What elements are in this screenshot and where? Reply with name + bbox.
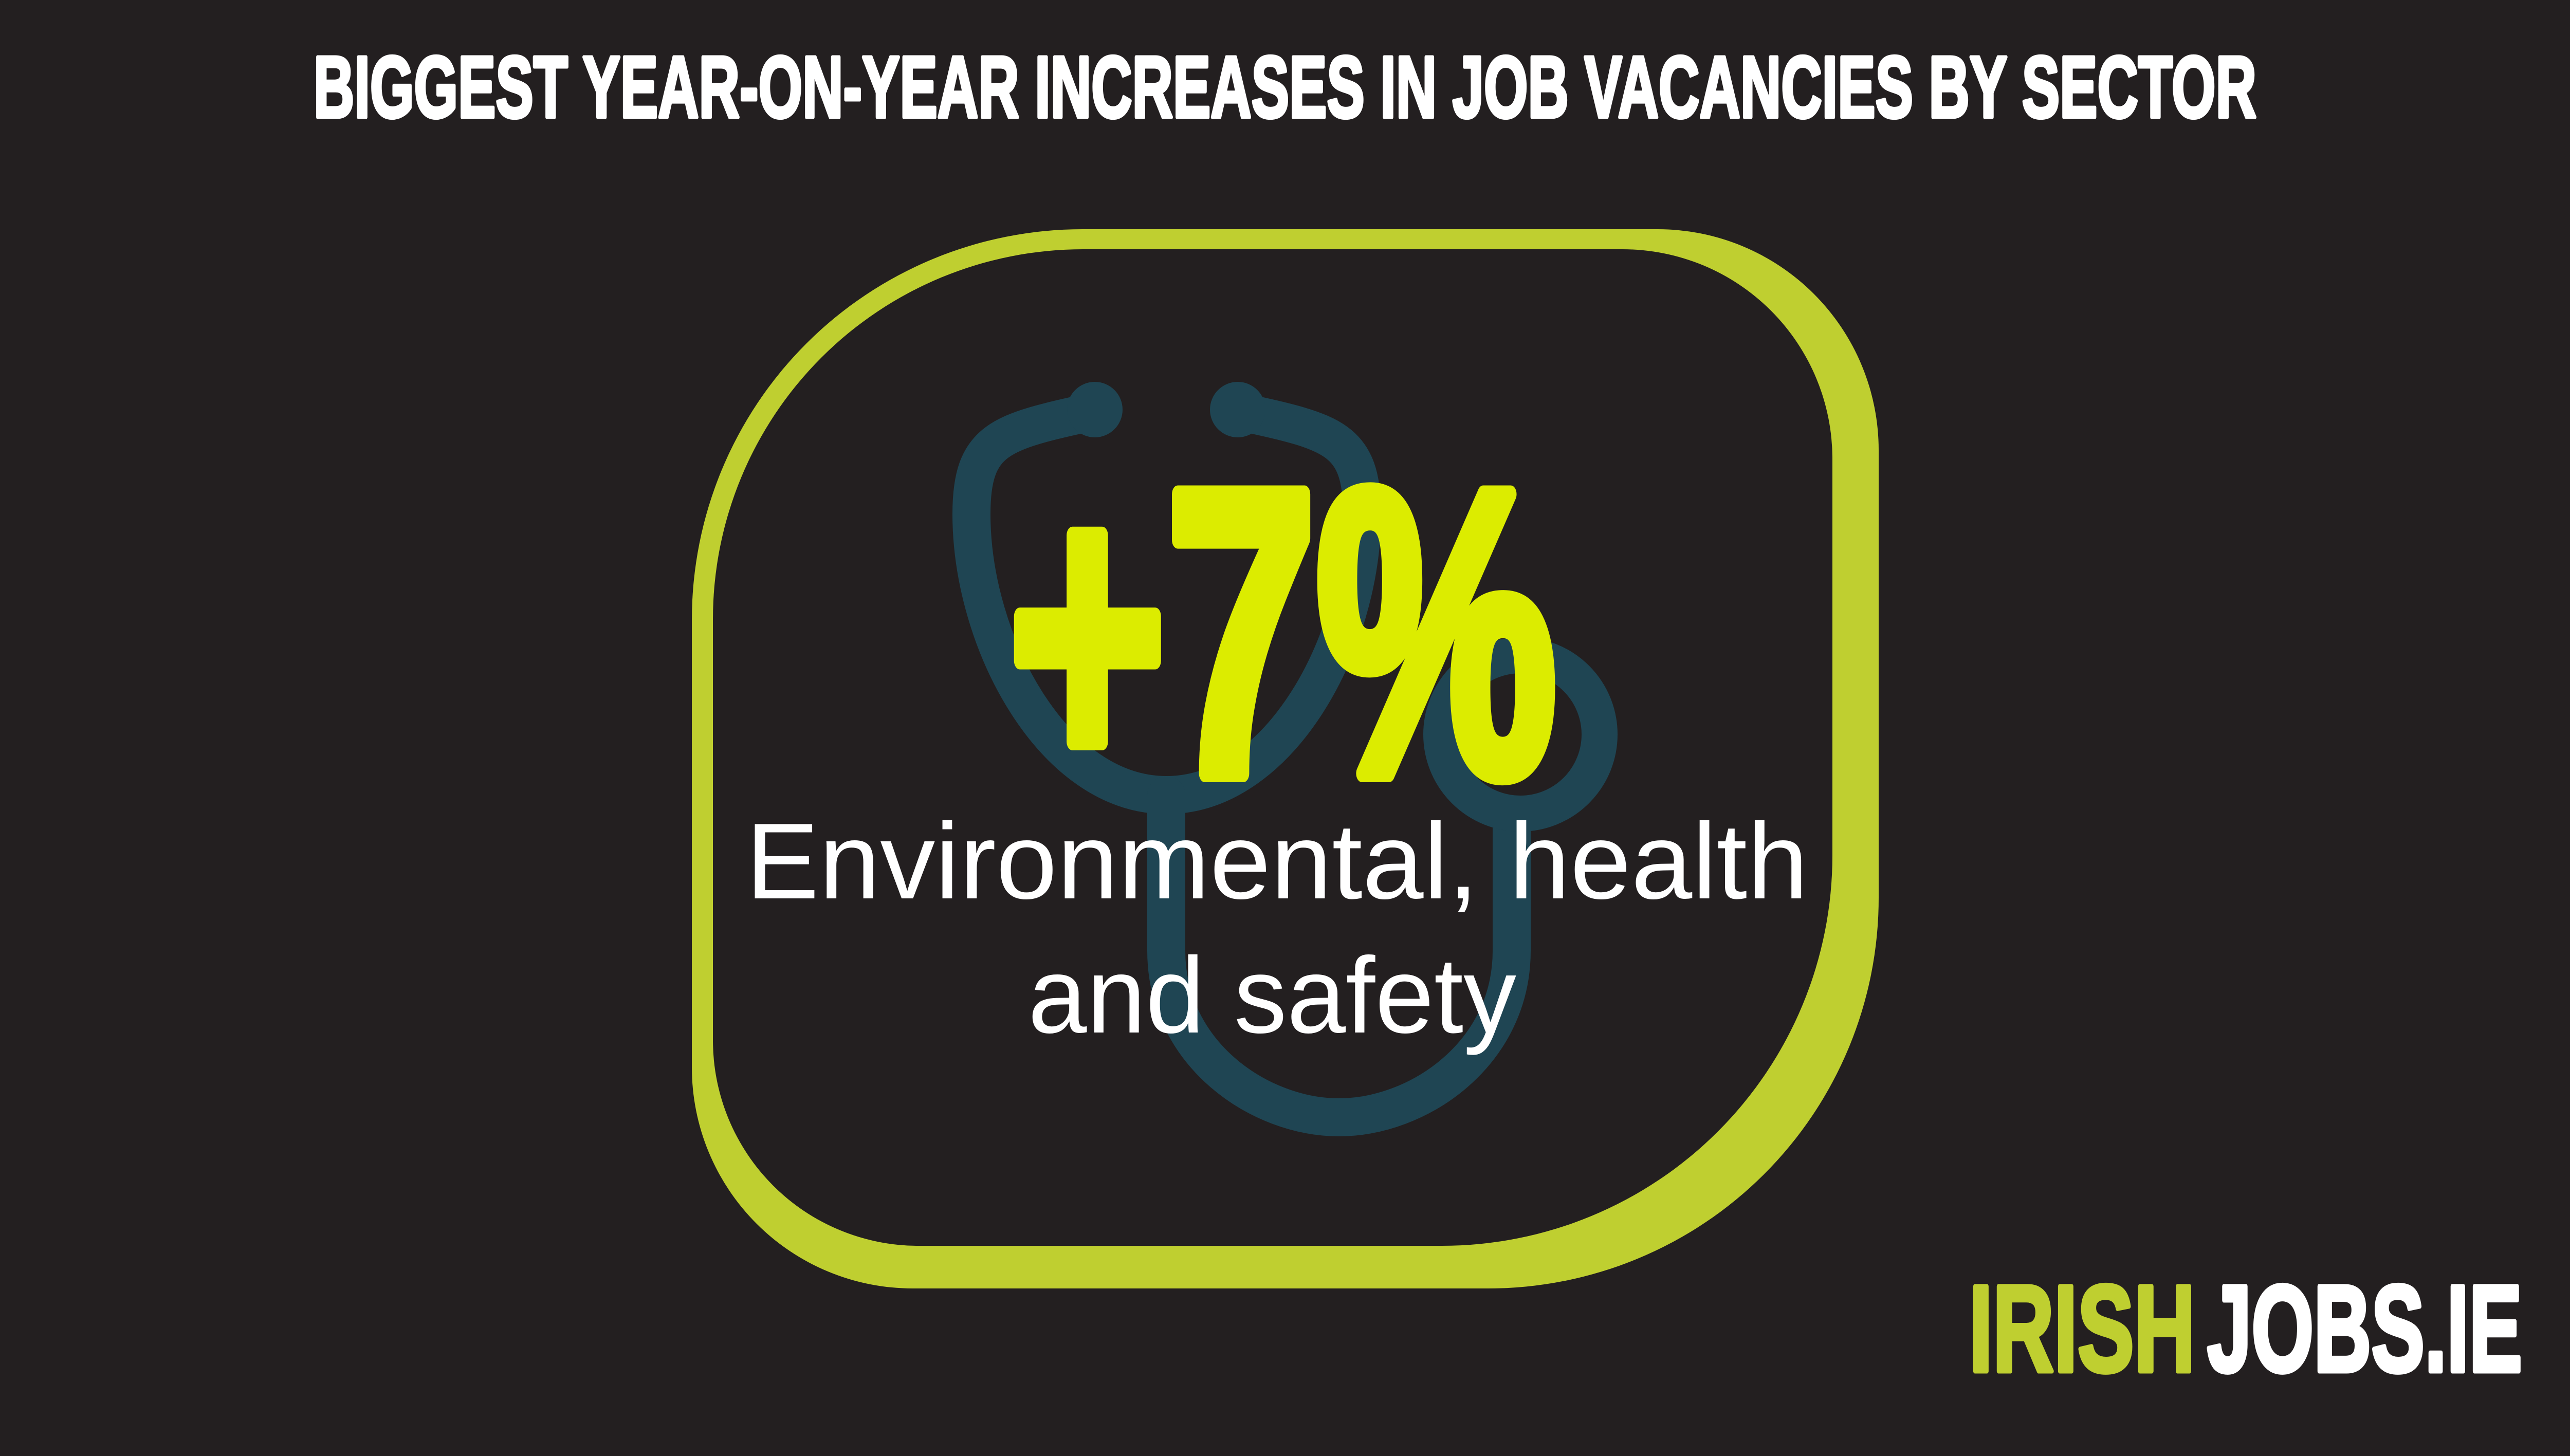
frame: lime rounded panel [692,229,1879,1288]
sector label: and safety [1028,935,1516,1056]
sector label: Environmental, health [746,801,1808,921]
icon: stethoscope [971,382,1600,1117]
headline figure: +7%: +7% [1008,407,1556,860]
logo: irishjobs.ie: IRISH [1969,1260,2195,1397]
sector label [746,801,1808,1056]
logo: irishjobs.ie [1969,1260,2522,1397]
